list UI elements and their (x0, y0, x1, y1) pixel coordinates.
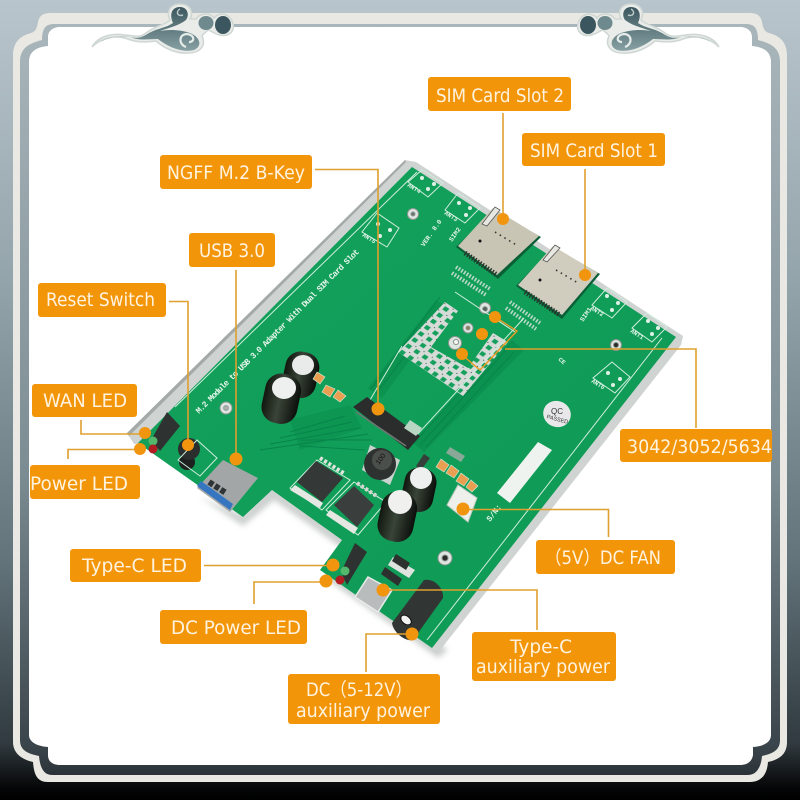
silkscreen: antenna blocks: ANT5 (361, 232, 377, 246)
silkscreen: antenna blocks: SIM1 (579, 306, 594, 323)
usb 3.0 port (197, 460, 258, 512)
label: USB 3.0: USB 3.0 (199, 240, 265, 262)
callout lines (68, 113, 696, 672)
traces: fan-out to M.2 connector (260, 297, 524, 452)
sticker: QC passed: PASSED (546, 414, 569, 426)
m.2 socket outline (370, 292, 524, 436)
silkscreen: antenna blocks: ANT1 (629, 328, 645, 342)
type-c and dc power leds (336, 543, 367, 585)
sim card slot 2 (456, 207, 541, 279)
reset switch (178, 438, 217, 476)
inductor (362, 445, 400, 485)
label: NGFF M.2 B-Key (160, 155, 312, 189)
silkscreen: antenna blocks: ANT4 (406, 182, 422, 196)
m.2 connector (353, 397, 422, 450)
silkscreen: antenna blocks: ANT6 (590, 378, 606, 392)
icon: left cloud ornament (92, 4, 233, 53)
label: WAN LED (32, 384, 137, 417)
small orange components (313, 372, 478, 492)
silkscreen: antenna blocks: CE (557, 356, 567, 366)
label: Type-C LED (70, 549, 201, 582)
silkscreen: antenna blocks: S/N: (485, 503, 504, 524)
label: Type-C LED: Type-C LED (81, 555, 187, 577)
label: 5V DC FAN: （5V）DC FAN (545, 547, 661, 569)
mounting holes (220, 208, 622, 565)
label: DC 5-12V auxiliary power: DC（5-12V） (306, 679, 412, 701)
silkscreen: antenna blocks: ANT2 (589, 305, 605, 319)
label: SIM Card Slot 1 (522, 133, 665, 166)
sim card slot 1 (516, 245, 600, 319)
label: SIM Card Slot 2 (428, 77, 571, 111)
fan connector (447, 485, 477, 522)
label: Type-C auxiliary power (472, 632, 616, 681)
wan and power leds (148, 412, 180, 454)
label: module sizes: 3042/3052/5634 (627, 436, 772, 458)
label: module sizes (620, 429, 772, 462)
capacitors lower pair (374, 465, 439, 545)
label: Power LED (30, 465, 140, 499)
label: Type-C auxiliary power: auxiliary power (476, 656, 610, 678)
circuit board (127, 160, 683, 658)
label: DC Power LED: DC Power LED (171, 617, 301, 639)
silkscreen: antenna blocks: VER. 8.0 (420, 218, 444, 248)
label: SIM Card Slot 2: SIM Card Slot 2 (436, 85, 564, 107)
label: WAN LED: WAN LED (43, 390, 127, 412)
label: SIM Card Slot 1: SIM Card Slot 1 (530, 140, 658, 162)
type-c connector (355, 577, 392, 612)
sticker: QC passed (539, 396, 575, 432)
label: DC Power LED (160, 610, 307, 644)
mosfets (290, 458, 386, 535)
label: DC 5-12V auxiliary power: auxiliary power (296, 700, 430, 722)
label: Reset Switch (38, 283, 166, 317)
label: Power LED: Power LED (30, 473, 128, 495)
board shadow (200, 485, 448, 658)
sim pad rows (452, 267, 540, 329)
capacitors upper pair (258, 349, 322, 427)
metal plate edges (127, 160, 683, 654)
icon: right cloud ornament (578, 4, 719, 53)
label: Reset Switch: Reset Switch (46, 289, 155, 311)
serial number strip (497, 442, 552, 503)
silkscreen: antenna blocks: ANT3 (443, 210, 459, 224)
silkscreen: antenna blocks (361, 170, 667, 524)
inductor: 100 (375, 453, 387, 466)
label: Type-C auxiliary power: Type-C (509, 636, 572, 658)
callout dots (134, 213, 591, 640)
module grid pad (398, 302, 508, 396)
black diodes (381, 554, 415, 586)
text: board title silkscreen: M.2 Module to USB 3.0 Adapter With Dual SIM Card Slot (194, 247, 362, 416)
sticker: QC passed: QC (551, 407, 563, 416)
label: NGFF M.2 B-Key: NGFF M.2 B-Key (167, 162, 305, 184)
dc jack (392, 580, 443, 640)
pcb (138, 167, 676, 648)
label: USB 3.0 (189, 233, 275, 267)
label: DC 5-12V auxiliary power (288, 674, 440, 724)
silkscreen outline (175, 172, 662, 640)
label: 5V DC FAN (536, 540, 675, 574)
silkscreen: antenna blocks: SIM2 (448, 226, 463, 243)
